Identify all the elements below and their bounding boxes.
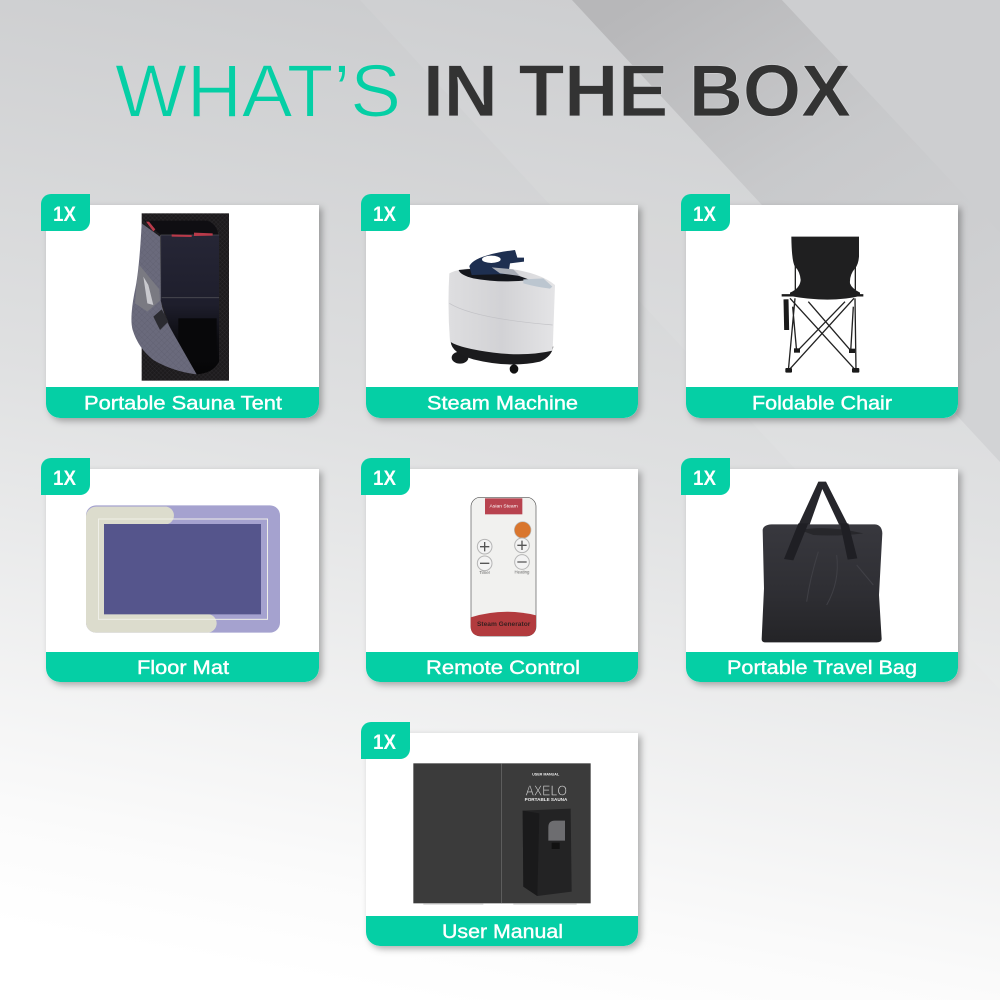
- photo: bag: [762, 482, 882, 642]
- quantity badge: [41, 194, 90, 231]
- label bar: [366, 916, 638, 946]
- panel: steam machine: [361, 194, 638, 418]
- panel: portable sauna tent: [41, 194, 319, 418]
- label bar: [686, 387, 958, 418]
- panel: portable travel bag: [681, 458, 958, 682]
- label bar: Steam Machine: [427, 392, 578, 414]
- photo: manual: [413, 763, 591, 904]
- panel: foldable chair: [681, 194, 958, 418]
- label bar: [366, 387, 638, 418]
- quantity badge: 1X: [373, 731, 396, 754]
- label bar: [46, 652, 319, 682]
- photo: remote: Heating: [515, 570, 530, 575]
- label bar: Portable Travel Bag: [727, 657, 917, 679]
- quantity badge: 1X: [53, 467, 76, 490]
- photo: manual: AXELO: [526, 783, 567, 799]
- photo: chair: [782, 237, 863, 373]
- quantity badge: [361, 194, 410, 231]
- quantity badge: [681, 458, 730, 495]
- label bar: Remote Control: [426, 657, 580, 679]
- label bar: Floor Mat: [137, 657, 230, 679]
- photo: remote: Steam Generator: [477, 621, 531, 628]
- quantity badge: [681, 194, 730, 231]
- panel: remote control: [361, 458, 638, 682]
- photo: remote: [471, 497, 536, 636]
- photo: tent: [131, 213, 229, 381]
- quantity badge: 1X: [373, 203, 396, 226]
- panel: floor mat: [41, 458, 319, 682]
- quantity badge: 1X: [693, 467, 716, 490]
- label bar: [366, 652, 638, 682]
- title: [115, 50, 851, 132]
- label bar: Portable Sauna Tent: [84, 392, 283, 414]
- photo: remote: Timer: [479, 570, 491, 575]
- photo: manual: USER MANUAL: [532, 773, 560, 777]
- label bar: [686, 652, 958, 682]
- photo: manual: PORTABLE SAUNA: [525, 797, 568, 802]
- quantity badge: 1X: [373, 467, 396, 490]
- photo: steam machine: [448, 250, 555, 374]
- quantity badge: 1X: [693, 203, 716, 226]
- label bar: Foldable Chair: [752, 392, 893, 414]
- quantity badge: [361, 458, 410, 495]
- photo: mat: [86, 505, 280, 633]
- title: what's (light teal): WHAT’S: [115, 50, 401, 132]
- panel: user manual: [361, 722, 638, 946]
- photo: remote: Asian Steam: [490, 504, 518, 510]
- label bar: [46, 387, 319, 418]
- quantity badge: 1X: [53, 203, 76, 226]
- title: in the box (bold dark): IN THE BOX: [423, 51, 851, 132]
- label bar: User Manual: [442, 921, 563, 943]
- quantity badge: [41, 458, 90, 495]
- quantity badge: [361, 722, 410, 759]
